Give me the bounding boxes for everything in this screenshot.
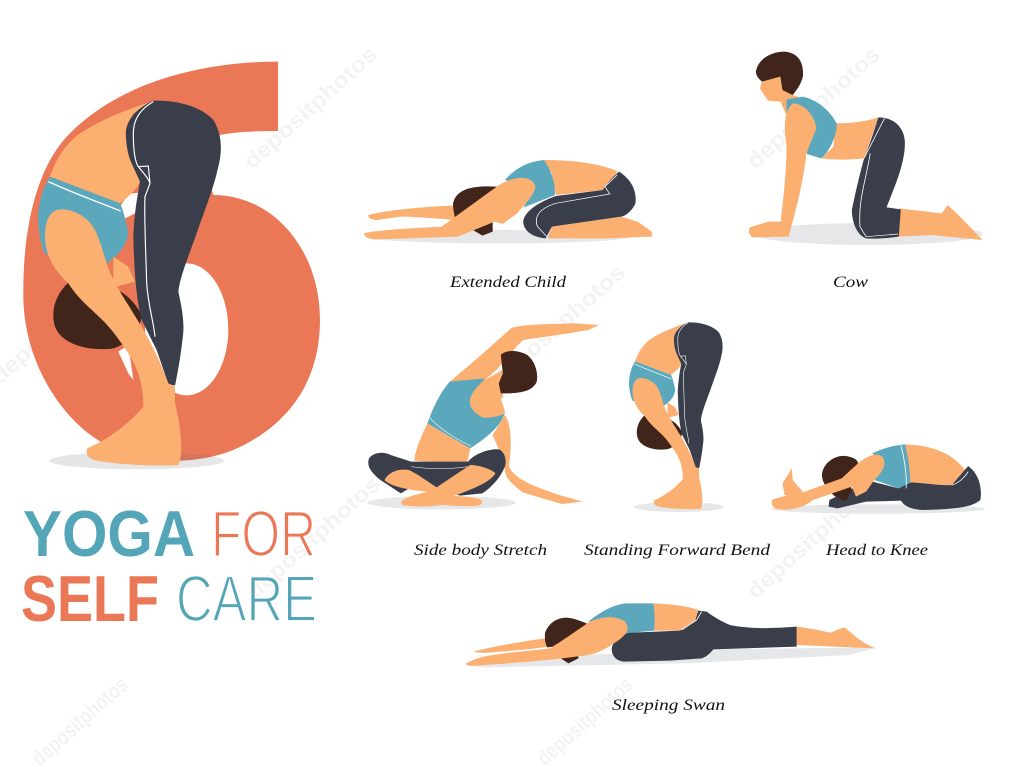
- ground shadow: [49, 452, 224, 469]
- title word: FOR: FOR: [211, 497, 316, 570]
- label: standing forward bend: Standing Forward Bend: [584, 542, 771, 559]
- numeral 6: [23, 62, 320, 461]
- big number six with standing figure: [23, 62, 320, 469]
- pose: cow: [749, 52, 982, 245]
- label: head to knee: Head to Knee: [825, 542, 928, 559]
- label: side body stretch: Side body Stretch: [414, 542, 547, 559]
- standing figure, large: [38, 101, 221, 466]
- title word: YOGA: YOGA: [23, 497, 195, 570]
- watermark: depositphotos: [487, 259, 630, 392]
- ground shadow small: [634, 502, 724, 512]
- pose: standing forward bend: [629, 322, 724, 512]
- watermark: depositphotos: [742, 41, 885, 174]
- label: cow: Cow: [833, 274, 868, 291]
- gaps in numeral: [118, 193, 138, 380]
- standing figure, small: [629, 322, 723, 509]
- label: sleeping swan: Sleeping Swan: [612, 697, 725, 714]
- pose: extended child: [364, 160, 652, 243]
- title: [21, 497, 317, 635]
- pose: head to knee: [771, 444, 985, 514]
- title word: CARE: CARE: [176, 562, 317, 635]
- watermark: depositphotos: [742, 471, 885, 604]
- pose: sleeping swan: [465, 603, 877, 667]
- watermark: depositphotos: [242, 471, 385, 604]
- label: extended child: Extended Child: [449, 274, 567, 291]
- watermark: depositphotos: [239, 41, 382, 174]
- title word: SELF: SELF: [21, 562, 159, 635]
- pose: side body stretch: [367, 323, 599, 509]
